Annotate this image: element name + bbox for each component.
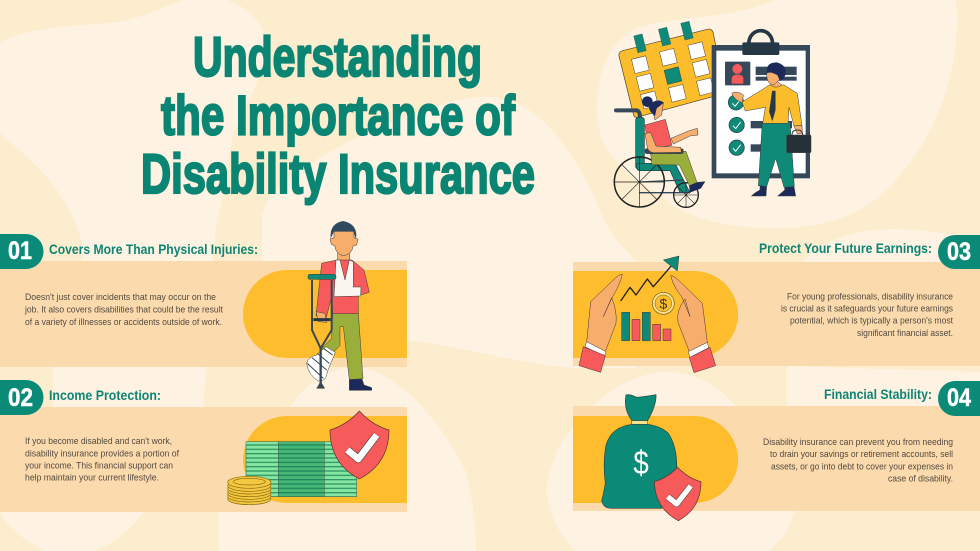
badge 03: 03: [947, 238, 971, 266]
wheelchair: [614, 110, 698, 207]
body text 01: of a variety of illnesses or accidents outside of work.: [25, 317, 222, 327]
body text 04: assets, or go into debt to cover your expenses in: [771, 462, 953, 472]
body text 02: disability insurance provides a portion of: [25, 448, 180, 458]
title: [141, 25, 535, 205]
body text 03: significant financial asset.: [857, 328, 953, 338]
heading 02: Income Protection:: [49, 387, 161, 403]
body text 02: [25, 436, 180, 482]
body text 04: [763, 437, 953, 484]
shield check: [330, 411, 389, 479]
illustration: man on crutch with arm sling and leg cast: [307, 221, 372, 390]
badge 01: [0, 234, 44, 269]
body text 02: help maintain your current lifestyle.: [25, 472, 159, 482]
shield check: [654, 467, 701, 521]
body text 02: If you become disabled and can't work,: [25, 436, 172, 446]
badge 02: 02: [8, 384, 33, 412]
title: Disability Insurance: [141, 142, 535, 205]
illustration: money bag with shield: [602, 395, 701, 521]
advisor figure: [732, 62, 811, 196]
panel: 04 financial stability: [573, 381, 980, 521]
panel: 02 income protection: [0, 380, 407, 512]
right hand: [671, 276, 716, 373]
badge 04: [938, 381, 980, 416]
body text 03: is crucial as it safeguards your future earnings: [781, 304, 954, 314]
growth arrow: [621, 256, 679, 301]
body text 03: potential, which is typically a person's most: [790, 316, 954, 326]
body text 03: For young professionals, disability insurance: [787, 292, 953, 302]
seated woman: [642, 96, 705, 192]
dollar coin: $: [659, 295, 667, 311]
body text 04: to drain your savings or retirement accounts, sell: [770, 449, 953, 459]
illustration: cash stacks, coins and shield: [228, 411, 389, 505]
body text 03: [781, 292, 954, 338]
panel: 03 protect your future earnings: [573, 235, 980, 373]
badge 01: 01: [8, 237, 32, 265]
left hand: [579, 274, 622, 372]
bar chart: [622, 312, 671, 341]
panel: 01 covers more than physical injuries: [0, 234, 407, 367]
calendar: [619, 21, 725, 117]
coin stack: [228, 476, 271, 505]
body text 02: your income. This financial support can: [25, 460, 173, 470]
body text 04: Disability insurance can prevent you from needing: [763, 437, 953, 447]
badge 02: [0, 380, 44, 415]
heading 04: Financial Stability:: [824, 386, 932, 402]
cash stacks: [246, 442, 357, 497]
illustration: wheelchair user and advisor with calendar and checklist: [614, 21, 811, 207]
heading 03: Protect Your Future Earnings:: [759, 240, 932, 256]
title: the Importance of: [161, 84, 515, 146]
badge 03: [938, 235, 980, 269]
money bag: $: [633, 445, 649, 482]
body text 04: case of disability.: [888, 474, 953, 484]
title: Understanding: [193, 25, 482, 88]
heading 01: Covers More Than Physical Injuries:: [49, 241, 258, 257]
body text 01: Doesn't just cover incidents that may occur on the: [25, 292, 216, 302]
illustration: hands around growth chart and coin: [579, 256, 716, 373]
body text 01: job. It also covers disabilities that could be the result: [24, 304, 224, 314]
clipboard checklist: [712, 31, 810, 178]
body text 01: [24, 292, 224, 327]
badge 04: 04: [947, 384, 971, 412]
